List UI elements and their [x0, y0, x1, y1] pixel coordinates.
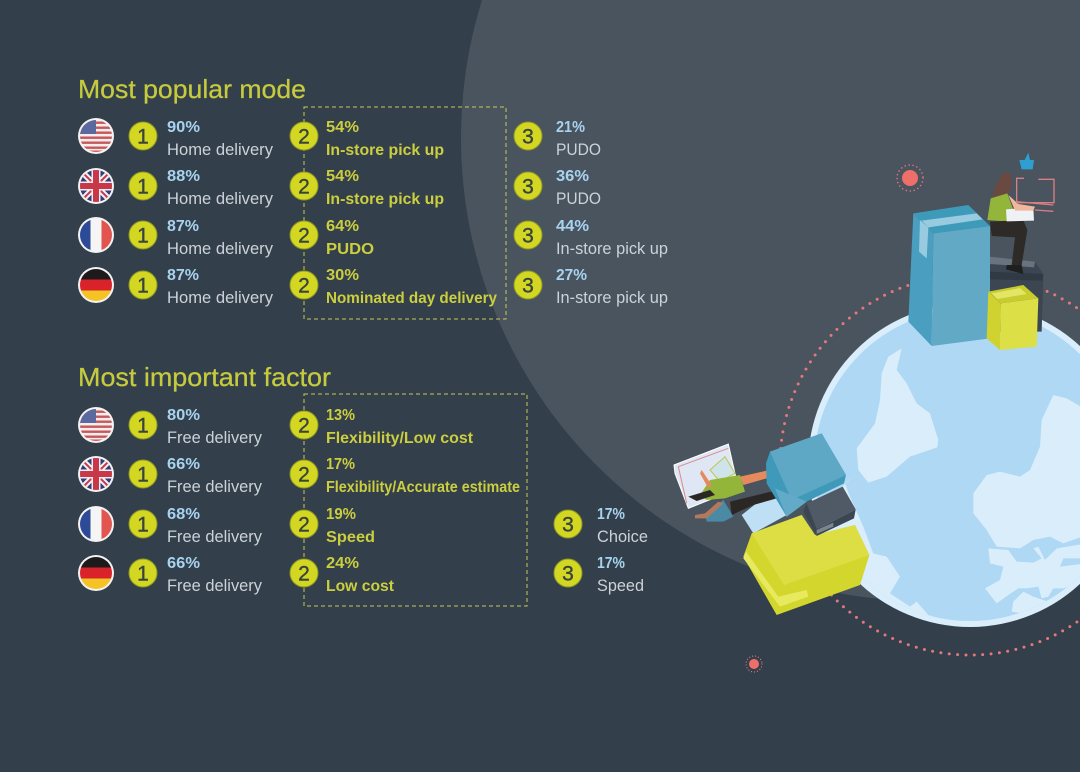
rank 2 badge [290, 122, 318, 150]
second choice: In-store pick up [326, 191, 444, 208]
second factor: 17% [326, 456, 355, 473]
row: France mode [78, 217, 668, 258]
rank 1 badge: 1 [137, 126, 149, 148]
third choice: In-store pick up [556, 289, 668, 307]
third factor: Speed [597, 577, 644, 595]
second choice: 54% [326, 168, 359, 185]
first factor [167, 407, 263, 447]
rank 3 badge: 3 [562, 562, 574, 586]
continents [820, 348, 1080, 627]
rank 2 badge [290, 172, 318, 200]
small dark box [803, 487, 856, 536]
rank 2 badge [290, 510, 318, 538]
second factor: Speed [326, 529, 375, 546]
second factor: 19% [326, 506, 356, 523]
icon: small red sun [746, 656, 762, 672]
second factor: Low cost [326, 578, 395, 595]
third choice: 36% [556, 168, 589, 185]
small yellow box [987, 285, 1038, 350]
row: USA mode [78, 118, 601, 159]
third choice: PUDO [556, 141, 601, 159]
first choice: Home delivery [167, 190, 274, 208]
rank 1 badge: 1 [137, 274, 149, 298]
rank 3 badge: 3 [522, 274, 534, 298]
rank 3 badge [514, 271, 542, 299]
first factor: Free delivery [167, 528, 263, 546]
rank 1 badge [129, 559, 157, 587]
rank 1 badge: 1 [137, 514, 149, 536]
rank 1 badge [129, 460, 157, 488]
rank 3 badge: 3 [522, 224, 534, 248]
icon: large red sun [897, 165, 923, 191]
rank 1 badge [129, 172, 157, 200]
second choice [326, 119, 444, 159]
third choice: PUDO [556, 190, 601, 208]
first factor: 68% [167, 506, 200, 523]
rank 1 badge: 1 [137, 464, 149, 486]
top box stack with seated woman [908, 153, 1054, 350]
flag: USA [78, 118, 114, 154]
flag: Germany [78, 267, 114, 303]
second choice: PUDO [326, 241, 374, 258]
first choice: 87% [167, 267, 199, 284]
third factor [597, 506, 648, 546]
globe [808, 303, 1080, 627]
rank 1 badge: 1 [137, 224, 149, 248]
rank 2 badge: 2 [298, 562, 310, 586]
rank 2 badge [290, 460, 318, 488]
rank 2 badge [290, 221, 318, 249]
second factor [326, 555, 395, 595]
dashed highlight box: mode [304, 107, 506, 319]
first choice: 87% [167, 218, 199, 235]
third choice: In-store pick up [556, 240, 668, 258]
first choice [167, 168, 274, 208]
second factor: Flexibility/Accurate estimate [326, 479, 520, 496]
rank 2 badge: 2 [298, 414, 310, 438]
row: UK factor [78, 456, 520, 496]
row: UK mode [78, 168, 601, 208]
first factor: 66% [167, 456, 200, 473]
second choice: 54% [326, 119, 359, 136]
flag: France [78, 217, 114, 253]
second choice [326, 168, 444, 208]
first factor [167, 506, 263, 546]
first factor [167, 456, 263, 496]
third choice: 27% [556, 267, 587, 284]
rank 2 badge [290, 271, 318, 299]
first choice: Home delivery [167, 141, 274, 159]
rank 2 badge: 2 [298, 126, 310, 148]
rank 2 badge: 2 [298, 224, 310, 248]
dark box step [987, 257, 1043, 332]
flag: USA [78, 407, 114, 443]
second factor [326, 407, 474, 447]
second factor [326, 506, 375, 546]
row: Germany factor [78, 555, 644, 595]
first choice: 88% [167, 168, 200, 185]
first factor [167, 555, 263, 595]
large background circle [461, 0, 1080, 601]
first choice: Home delivery [167, 289, 274, 307]
rank 3 badge [514, 172, 542, 200]
dashed highlight box: factor [304, 394, 527, 606]
thumbs up icon [1019, 153, 1034, 169]
first choice: Home delivery [167, 240, 274, 258]
rank 1 badge [129, 221, 157, 249]
first factor: Free delivery [167, 429, 263, 447]
flag: Germany [78, 555, 114, 591]
rank 2 badge [290, 411, 318, 439]
rank 3 badge [514, 122, 542, 150]
first choice [167, 119, 274, 159]
flag: UK [78, 456, 114, 492]
second factor: 13% [326, 407, 355, 424]
first choice [167, 267, 274, 307]
third factor [597, 555, 644, 595]
row: France factor [78, 506, 648, 546]
third choice [556, 267, 668, 307]
large yellow box [743, 515, 869, 615]
second choice [326, 218, 374, 258]
rank 1 badge [129, 411, 157, 439]
light stripes platform [742, 490, 787, 533]
third choice: 21% [556, 119, 585, 136]
heading: most important factor: Most important factor [78, 362, 331, 392]
tall blue box [908, 205, 990, 346]
first factor: Free delivery [167, 577, 263, 595]
rank 1 badge: 1 [137, 414, 149, 438]
third choice [556, 218, 668, 258]
second factor: 24% [326, 555, 359, 572]
second factor [326, 456, 520, 496]
row: Germany mode [78, 267, 668, 307]
blue box [766, 433, 846, 517]
tablet panel [674, 444, 738, 508]
flag: UK [78, 168, 114, 204]
first choice: 90% [167, 119, 200, 136]
third choice [556, 168, 601, 208]
rank 1 badge: 1 [137, 176, 149, 198]
third factor: 17% [597, 506, 625, 523]
rank 3 badge [514, 221, 542, 249]
second choice: Nominated day delivery [326, 290, 497, 307]
heading: most popular mode: Most popular mode [78, 74, 306, 104]
second choice [326, 267, 497, 307]
first factor: Free delivery [167, 478, 263, 496]
figure lying sideways [688, 470, 777, 522]
rank 2 badge: 2 [298, 464, 310, 486]
woman seated at laptop [987, 173, 1035, 274]
rank 1 badge [129, 510, 157, 538]
row: USA factor [78, 407, 474, 447]
rank 2 badge: 2 [298, 176, 310, 198]
lower box stack with lying figure [674, 433, 869, 615]
first factor: 66% [167, 555, 200, 572]
rank 2 badge: 2 [298, 514, 310, 536]
rank 3 badge: 3 [522, 176, 534, 198]
rank 3 badge: 3 [562, 514, 574, 536]
third choice: 44% [556, 218, 589, 235]
rank 2 badge [290, 559, 318, 587]
third choice [556, 119, 601, 159]
rank 3 badge: 3 [522, 126, 534, 148]
rank 1 badge [129, 122, 157, 150]
second choice: 30% [326, 267, 359, 284]
laptop screen icon [1017, 178, 1054, 211]
rank 1 badge [129, 271, 157, 299]
rank 3 badge [554, 510, 582, 538]
rank 2 badge: 2 [298, 274, 310, 298]
second choice: In-store pick up [326, 142, 444, 159]
flag: France [78, 506, 114, 542]
second choice: 64% [326, 218, 359, 235]
first choice [167, 218, 274, 258]
dotted orbit ring [780, 275, 1080, 655]
third factor: Choice [597, 528, 648, 546]
rank 3 badge [554, 559, 582, 587]
second factor: Flexibility/Low cost [326, 430, 474, 447]
third factor: 17% [597, 555, 625, 572]
first factor: 80% [167, 407, 200, 424]
rank 1 badge: 1 [137, 562, 149, 586]
